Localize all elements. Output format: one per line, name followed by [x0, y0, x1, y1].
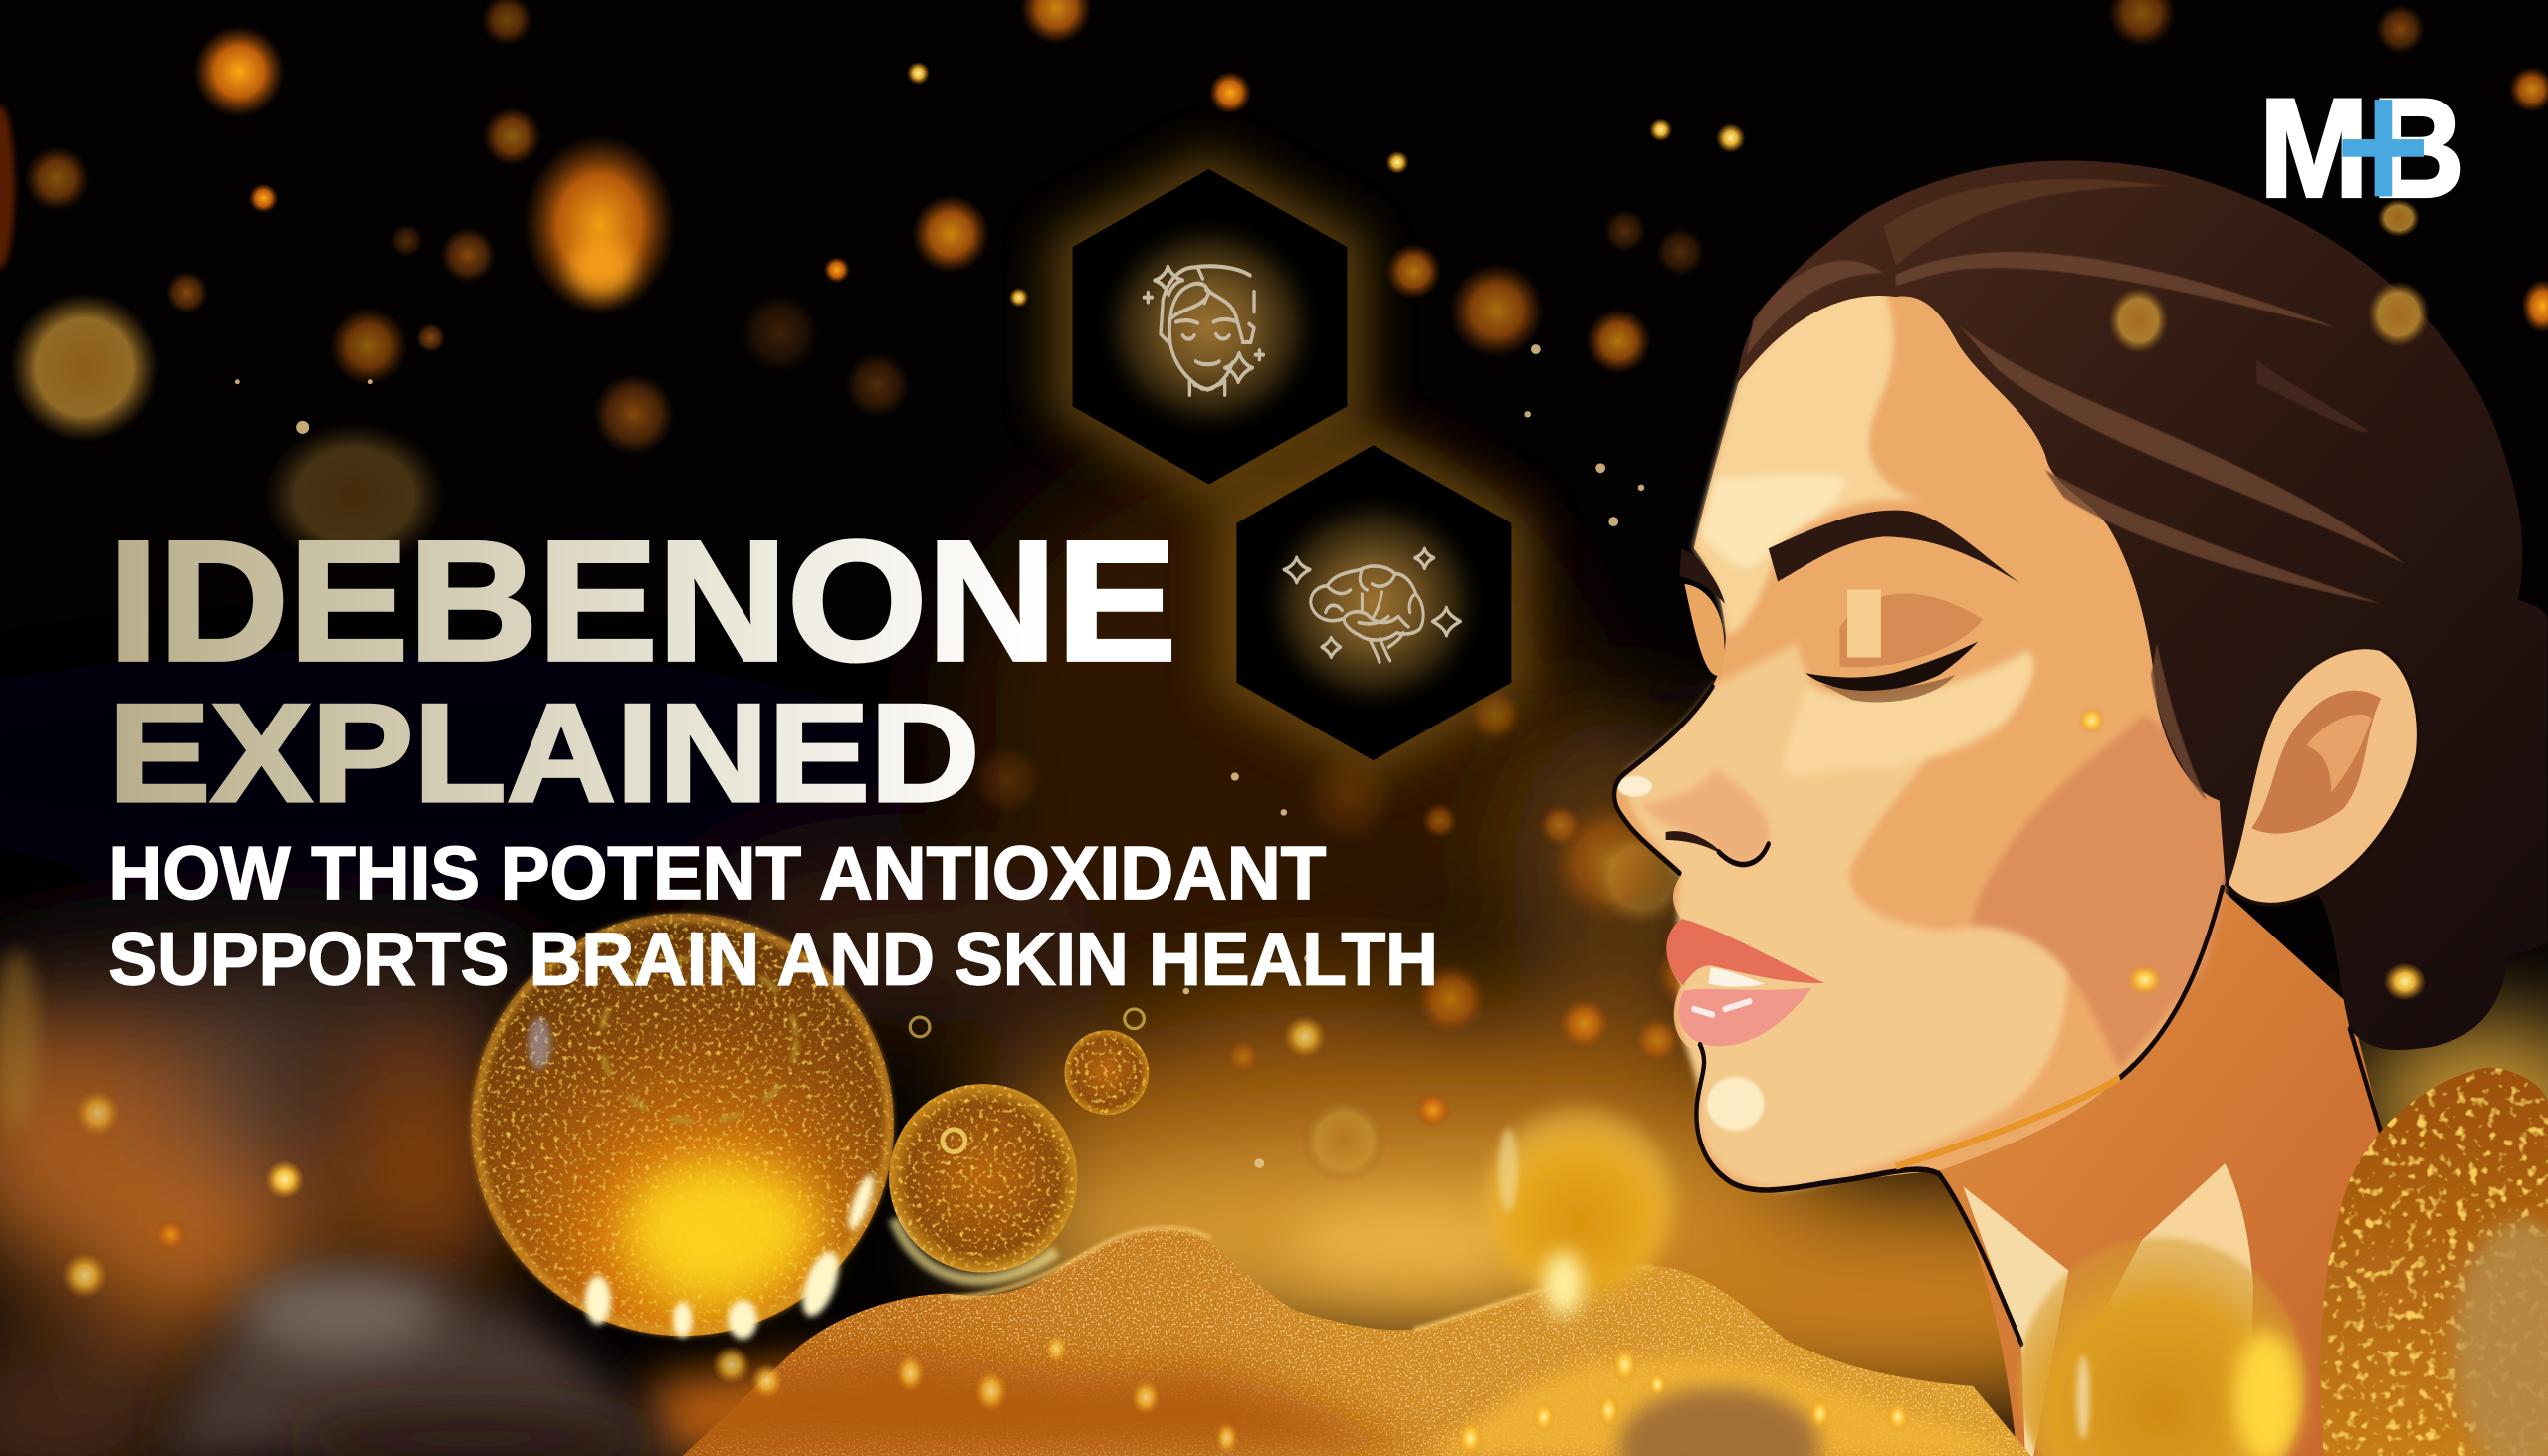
inner ear	[2251, 691, 2381, 834]
sparkle lights on face	[2078, 707, 2105, 734]
icon: face with sparkles	[1144, 266, 1263, 395]
small spiky bubble	[889, 1084, 1077, 1280]
jaw gold line	[1896, 1078, 2120, 1166]
forehead highlight	[1700, 475, 1846, 568]
ear	[2229, 649, 2417, 905]
teeth	[1708, 967, 1766, 987]
hexagon: brain icon	[1236, 445, 1511, 760]
smoky grey mound	[162, 1288, 683, 1456]
large glowing bubble	[471, 914, 894, 1339]
under-lash shade	[1821, 675, 1955, 702]
cheek light area	[1625, 643, 2067, 1190]
soft skin tones	[1625, 289, 2231, 1190]
forehead light area	[1694, 289, 1921, 634]
lip shine	[1694, 1001, 1750, 1015]
left edge red haze	[0, 105, 15, 268]
bright rim flares	[585, 1172, 879, 1339]
neck highlight: front wedge	[1963, 1186, 2069, 1456]
cheek rose shadow	[1971, 714, 2231, 1068]
bubble bright core	[2234, 1333, 2299, 1456]
left edge gold strip	[0, 950, 39, 1130]
inner ear light	[2306, 715, 2372, 793]
far brow	[1679, 548, 1725, 604]
grey mound highlight	[241, 1271, 442, 1355]
title line 1: IDEBENONE	[108, 507, 1176, 697]
hexagon: skin icon	[1073, 169, 1347, 485]
eyelid highlight	[1847, 589, 1881, 657]
dark bottom mound	[1618, 1387, 1820, 1456]
under-eye highlight	[1784, 651, 2034, 775]
foreground gold bubble	[2018, 1238, 2304, 1456]
golden foam terrain	[162, 1227, 2031, 1456]
gold foam right	[2018, 1068, 2548, 1456]
blurred orange lower band	[650, 1349, 1430, 1456]
title line 2: EXPLAINED	[108, 675, 979, 831]
bubble left glint	[2077, 1355, 2090, 1440]
tiny specks	[235, 344, 1644, 1168]
eyelid	[1840, 593, 1983, 667]
title	[108, 507, 1438, 1000]
lower lip	[1679, 988, 1811, 1046]
terrain crest highlight	[949, 1228, 1652, 1330]
logo: M	[2259, 69, 2369, 226]
nose shadow	[1641, 769, 1770, 865]
logo: B	[2372, 69, 2465, 226]
closed eye lashes	[1805, 642, 1978, 691]
logo	[2259, 69, 2465, 226]
right blurred bubble	[2453, 1219, 2548, 1456]
illustration: woman in profile	[1614, 161, 2548, 1456]
hair mass	[1737, 161, 2548, 1050]
nose tip highlight	[1617, 776, 1652, 796]
terrain lower bright band	[1430, 1358, 2015, 1456]
far eye	[1684, 584, 1725, 676]
neck	[1940, 887, 2406, 1456]
hair highlights	[1747, 179, 2406, 800]
face outline	[1614, 687, 2384, 1344]
tiny bubble	[910, 1009, 1149, 1115]
chin highlight	[1707, 1077, 1764, 1131]
far lashes	[1648, 676, 1713, 703]
subtitle line 1: HOW THIS POTENT ANTIOXIDANT	[108, 831, 1326, 915]
eyebrow	[1769, 511, 2021, 584]
nostril	[1666, 831, 1727, 857]
bokeh dots on band	[712, 1335, 1238, 1454]
ear outline	[2226, 650, 2418, 905]
dark lower left	[293, 1405, 650, 1456]
upper lip	[1666, 919, 1824, 985]
neck highlight: collar wedge	[2107, 1163, 2253, 1367]
bright dots on mound rim	[1457, 1346, 1909, 1456]
haze left of bubble	[1292, 1201, 1520, 1286]
face skin	[1615, 266, 2256, 1191]
blurred gold bubble left of neck	[1485, 1109, 1674, 1317]
subtitle line 2: SUPPORTS BRAIN AND SKIN HEALTH	[108, 917, 1438, 1000]
icon: brain with sparkles	[1284, 548, 1460, 662]
hexagon glow	[1050, 149, 1533, 780]
